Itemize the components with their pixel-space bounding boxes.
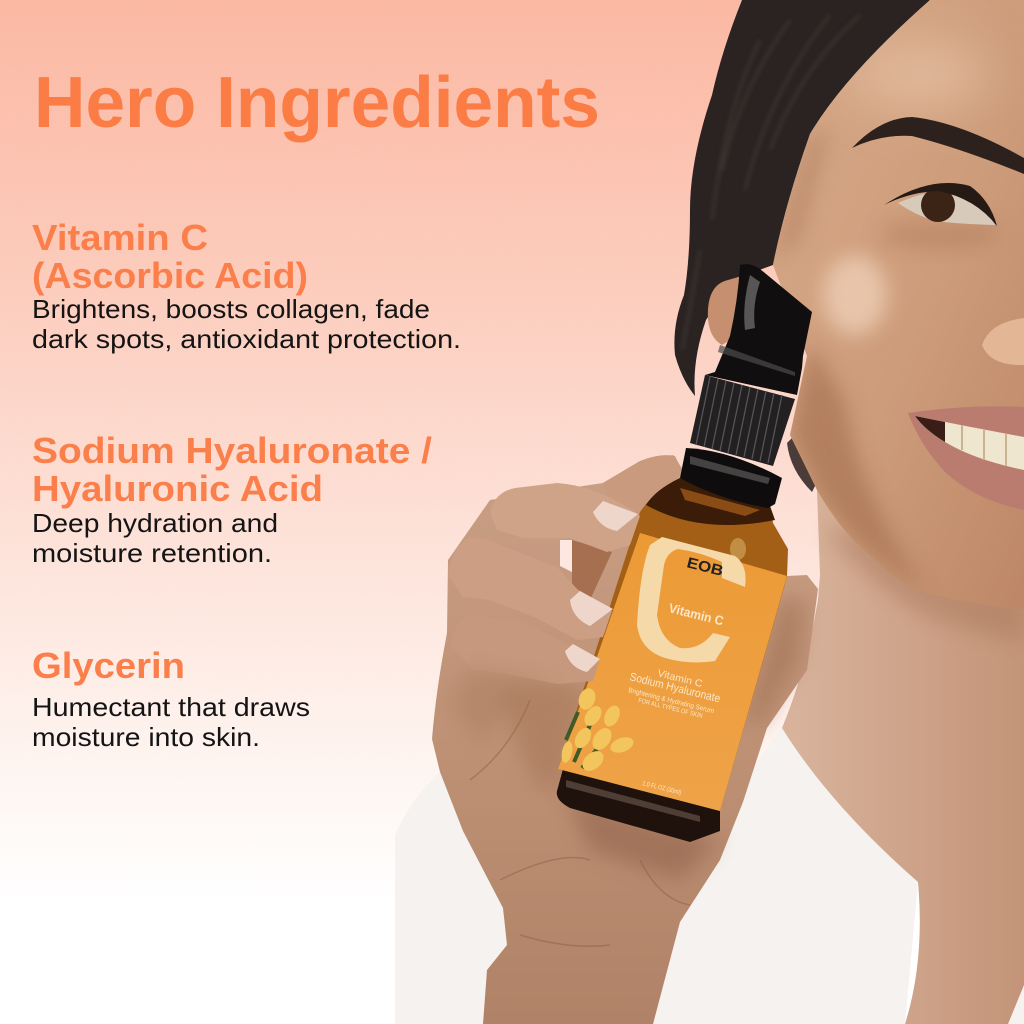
eye xyxy=(898,191,995,225)
label logo: EOB xyxy=(685,554,725,580)
label text xyxy=(628,600,726,797)
label text: 1.0 FL OZ (30ml) xyxy=(642,780,682,797)
label text: Vitamin C xyxy=(667,600,726,629)
fingernails xyxy=(565,501,638,672)
ear xyxy=(708,275,745,345)
lips xyxy=(908,406,1024,510)
hair highlights xyxy=(682,15,860,350)
neck ring xyxy=(680,448,782,508)
label text: FOR ALL TYPES OF SKIN xyxy=(638,697,703,720)
ingredient: Glycerin: moisture into skin. xyxy=(32,722,260,752)
ingredient: Sodium Hyaluronate xyxy=(32,430,432,568)
finger shadow behind xyxy=(572,540,612,600)
label xyxy=(558,533,787,811)
label text: Vitamin C xyxy=(656,668,704,690)
ingredient: Sodium Hyaluronate: Deep hydration and xyxy=(32,508,278,538)
title: Hero Ingredients xyxy=(34,63,600,143)
ingredient: Vitamin C: Vitamin C xyxy=(32,217,208,258)
shirt xyxy=(395,728,1024,1024)
tulip flowers xyxy=(560,686,636,775)
thumb top finger xyxy=(603,455,682,520)
teeth gaps xyxy=(962,425,1006,466)
ribbed collar xyxy=(690,375,795,466)
face shading xyxy=(773,40,1000,593)
ingredient: Sodium Hyaluronate: Sodium Hyaluronate / xyxy=(32,430,432,471)
ingredient: Glycerin: Humectant that draws xyxy=(32,692,310,722)
serum bottle xyxy=(557,264,812,842)
ring finger xyxy=(450,615,600,684)
nose xyxy=(982,318,1024,365)
ingredient: Vitamin C: Brightens, boosts collagen, fade xyxy=(32,294,430,324)
gap between fingers xyxy=(560,540,572,572)
dark hair behind jaw xyxy=(787,430,818,492)
fingers over bottle xyxy=(448,483,640,745)
palm creases xyxy=(470,700,690,946)
mouth interior xyxy=(915,416,1024,470)
photo: woman holding serum xyxy=(395,0,1024,1024)
ingredient: Glycerin xyxy=(32,645,310,752)
pump cap xyxy=(705,264,812,395)
middle finger xyxy=(448,538,612,640)
label text: Sodium Hyaluronate xyxy=(628,671,721,705)
amber glass xyxy=(558,478,788,811)
hair xyxy=(674,0,930,396)
ingredient: Glycerin: Glycerin xyxy=(32,645,185,686)
tulip stems xyxy=(566,712,600,768)
ingredient: Vitamin C: (Ascorbic Acid) xyxy=(32,255,308,296)
ingredient: Sodium Hyaluronate: Hyaluronic Acid xyxy=(32,468,323,509)
index finger xyxy=(490,483,640,552)
label big C xyxy=(637,537,746,662)
ingredient: Vitamin C: dark spots, antioxidant protection. xyxy=(32,324,461,354)
label text: Brightening & Hydrating Serum xyxy=(628,687,715,715)
hand palm xyxy=(432,455,818,1024)
eyebrow xyxy=(852,117,1024,174)
ingredient: Vitamin C xyxy=(32,217,461,354)
ingredient: Sodium Hyaluronate: moisture retention. xyxy=(32,538,272,568)
neck and chest xyxy=(782,490,1024,1024)
base xyxy=(557,769,720,842)
face xyxy=(773,0,1024,609)
